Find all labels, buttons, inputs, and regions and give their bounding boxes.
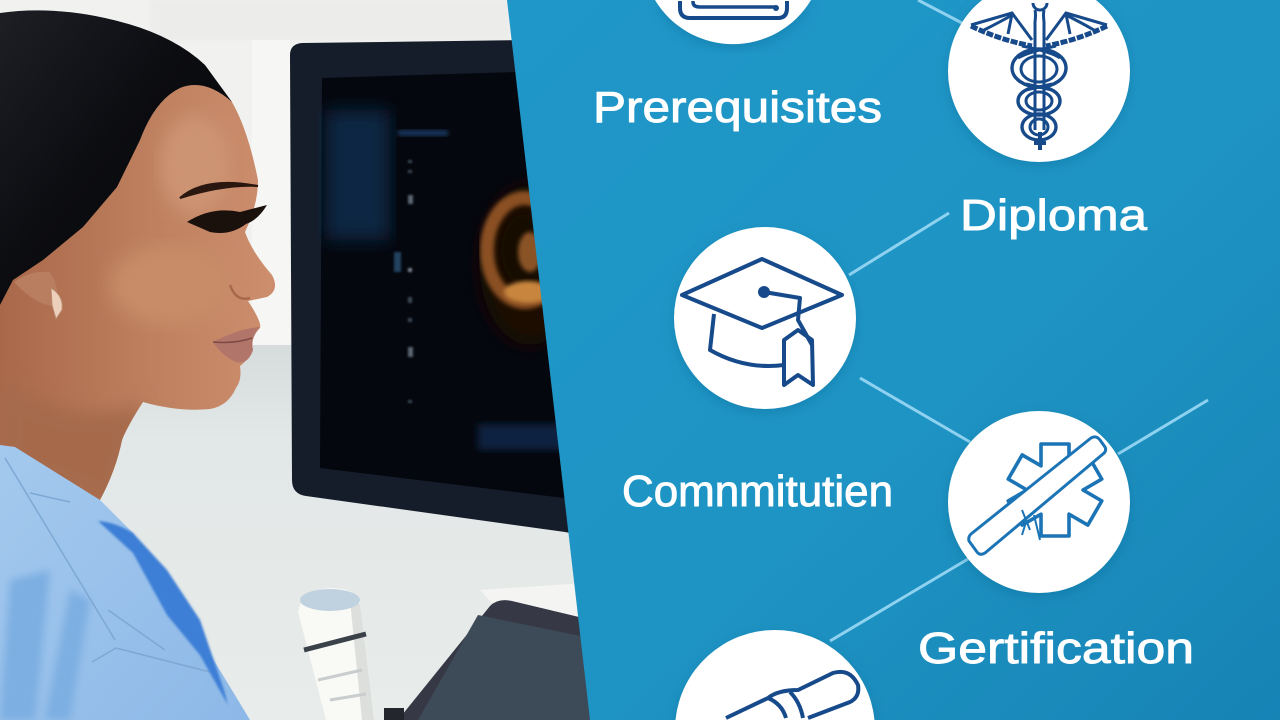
ear bbox=[14, 272, 57, 306]
connector lines bbox=[830, 0, 1208, 641]
ultrasound scan image bbox=[480, 185, 580, 345]
tablet on desk bbox=[384, 582, 600, 720]
face and neck bbox=[0, 85, 276, 500]
ultrasound monitor bbox=[290, 40, 580, 535]
photo background: clinic room bbox=[0, 0, 600, 720]
collar edge bbox=[98, 521, 228, 705]
step 3 icon: graduation cap bbox=[674, 227, 856, 409]
earring bbox=[51, 288, 62, 319]
nurse portrait bbox=[0, 10, 290, 720]
hair bbox=[0, 10, 232, 305]
heading: Gertification: Gertification bbox=[918, 624, 1194, 673]
panel: blue career pathway bbox=[507, 0, 1280, 720]
screen readouts bbox=[325, 110, 568, 450]
shirt seams bbox=[5, 458, 210, 672]
nostril bbox=[230, 285, 250, 299]
lips bbox=[213, 327, 260, 362]
heading: garbled credential label: Comnmitutien bbox=[622, 467, 893, 516]
scrub top bbox=[0, 445, 250, 720]
step 4 icon: star of life with diploma bbox=[948, 411, 1130, 593]
eyebrow bbox=[180, 183, 258, 198]
heading: Prerequisites: Prerequisites bbox=[593, 83, 882, 132]
step 5 icon: scroll bbox=[676, 630, 874, 720]
shirt folds bbox=[0, 570, 90, 720]
eye bbox=[187, 205, 267, 233]
step 1 icon: prerequisites tablet bbox=[655, 0, 811, 44]
step 2 icon: caduceus bbox=[948, 0, 1130, 162]
ultrasound probe bbox=[298, 588, 374, 720]
heading: Diploma: Diploma bbox=[960, 191, 1148, 240]
